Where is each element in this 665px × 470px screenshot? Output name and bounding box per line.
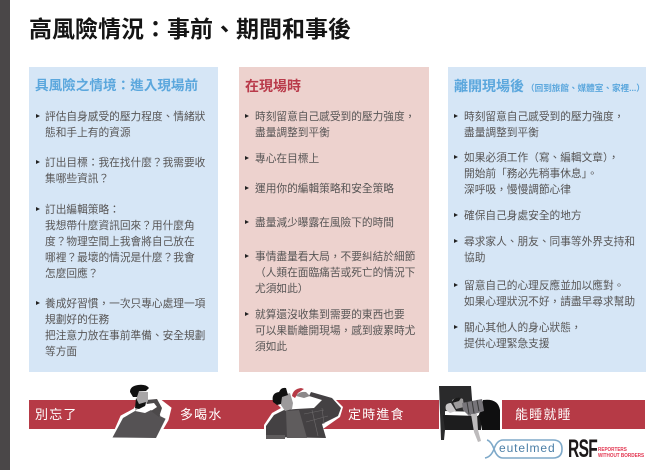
item: good habits: 等方面 (45, 346, 77, 358)
panel: after leaving the field (448, 67, 646, 372)
item: leave decisively: 就算還沒收集到需要的東西也要 (255, 309, 405, 321)
item: big picture: 事情盡量看大局，不要糾結於細節 (255, 251, 415, 263)
sofa back (439, 386, 473, 440)
item: rest before working: 開始前「務必先稍事休息」。 (464, 168, 598, 180)
item: care for others: 關心其他人的身心狀態， (464, 322, 582, 334)
panel: before entering the field (29, 67, 218, 372)
item: safe place: 確保自己身處安全的地方 (464, 210, 582, 222)
hair (130, 385, 149, 397)
white outline (264, 387, 343, 439)
item: big picture: 尤須如此） (255, 283, 308, 295)
reminder banner (29, 400, 645, 429)
reporters without borders text: WITHOUT BORDERS (598, 453, 644, 459)
lower jacket hem (266, 435, 285, 439)
item: rest before working: 如果必須工作（寫、編輯文章）， (464, 152, 619, 164)
item: leave decisively: 須如此 (255, 341, 287, 353)
item: use strategies: 運用你的編輯策略和安全策略 (255, 183, 394, 195)
hand (296, 392, 310, 398)
item: psychological response (454, 278, 635, 310)
pillow (446, 403, 456, 413)
item: editorial strategy: 我想帶什麼資訊回來？用什麼角 (45, 220, 195, 232)
item: editorial strategy (36, 202, 195, 282)
sofa base (443, 415, 481, 430)
left dark edge bar (0, 0, 10, 470)
item: watch stress (245, 109, 415, 141)
panel heading: before: 具風險之情境：進入現場前 (35, 78, 198, 93)
illustration: man eating (264, 388, 343, 439)
item: psychological response: 如果心理狀況不好，請盡早尋求幫助 (464, 296, 635, 308)
item: big picture: （人類在面臨痛苦或死亡的情況下 (255, 267, 415, 279)
item: assess stress (36, 109, 205, 141)
RSF wordmark: RSF (568, 435, 597, 463)
banner red strip (29, 400, 439, 429)
title: 高風險情況：事前、期間和事後 (29, 16, 351, 42)
panel: during time in the field (239, 67, 429, 372)
torso (112, 410, 166, 438)
item: set goals (36, 155, 205, 187)
item: focus on goal: 專心在目標上 (255, 153, 319, 165)
item: watch stress (454, 109, 624, 141)
item: set goals: 訂出目標：我在找什麼？我需要收 (45, 157, 205, 169)
item: watch stress: 盡量調整到平衡 (255, 127, 330, 139)
item: set goals: 集哪些資訊？ (45, 173, 109, 185)
item: leave decisively: 可以果斷離開現場，感到疲累時尤 (255, 325, 415, 337)
plaid lines (304, 408, 328, 436)
item: rest before working (454, 150, 619, 198)
reporters without borders text: REPORTERS (598, 447, 627, 453)
item: seek support (454, 234, 635, 266)
item: reduce exposure: 盡量減少曝露在風險下的時間 (255, 217, 394, 229)
item: editorial strategy: 訂出編輯策略： (45, 204, 120, 216)
eutelmed wordmark: eutelmed (499, 441, 556, 455)
item: editorial strategy: 哪裡？最壞的情況是什麼？我會 (45, 252, 195, 264)
banner text: don't forget: 別忘了 (35, 407, 78, 422)
item: editorial strategy: 怎麼回應？ (45, 268, 98, 280)
hanging arm (471, 414, 481, 442)
panel heading: during: 在現場時 (245, 78, 301, 94)
striped shirt (462, 399, 484, 416)
beard (135, 398, 146, 409)
illustration: person asleep on sofa (439, 386, 500, 442)
face (281, 393, 293, 411)
item: seek support: 協助 (464, 252, 485, 264)
item: good habits: 把注意力放在事前準備、安全規劃 (45, 330, 205, 342)
item: editorial strategy: 度？物理空間上我會將自己放在 (45, 236, 195, 248)
item: big picture (245, 249, 415, 297)
item: leave decisively (245, 307, 415, 355)
item: rest before working: 深呼吸，慢慢調節心律 (464, 184, 571, 196)
seat cushion (445, 411, 480, 416)
item: assess stress: 評估自身感受的壓力程度、情緒狀 (45, 111, 205, 123)
raised arm (155, 399, 169, 419)
neck and face (135, 391, 148, 411)
item: good habits: 養成好習慣，一次只專心處理一項 (45, 298, 205, 310)
item: good habits: 規劃好的任務 (45, 314, 109, 326)
illustration: man drinking water (112, 384, 172, 438)
item: care for others: 提供心理緊急支援 (464, 338, 550, 350)
sofa arm (479, 400, 500, 430)
item: watch stress: 時刻留意自己感受到的壓力強度， (464, 111, 624, 123)
logo: RSF (568, 435, 644, 463)
apple (292, 388, 304, 398)
item: seek support: 尋求家人、朋友、同事等外界支持和 (464, 236, 635, 248)
item: watch stress: 盡量調整到平衡 (464, 127, 539, 139)
head (452, 398, 464, 409)
shirt (286, 410, 307, 438)
panel heading: after: 離開現場後（回到旅館、媒體室、家裡...） (454, 78, 645, 94)
item: psychological response: 留意自己的心理反應並加以應對。 (464, 280, 624, 292)
item: assess stress: 態和手上有的資源 (45, 127, 131, 139)
banner red strip right (502, 400, 645, 429)
item: watch stress: 時刻留意自己感受到的壓力強度， (255, 111, 415, 123)
logo: eutelmed (484, 439, 563, 459)
plaid jacket (266, 392, 341, 438)
item: good habits (36, 296, 205, 360)
white outline of arm and torso (111, 397, 171, 439)
reporters without borders text (598, 447, 644, 459)
hair (273, 388, 288, 405)
banner text: drink water: 多喝水 (180, 407, 223, 422)
banner text: eat regularly: 定時進食 (348, 407, 405, 422)
item: care for others (454, 320, 582, 352)
banner text: sleep: 能睡就睡 (515, 407, 572, 422)
